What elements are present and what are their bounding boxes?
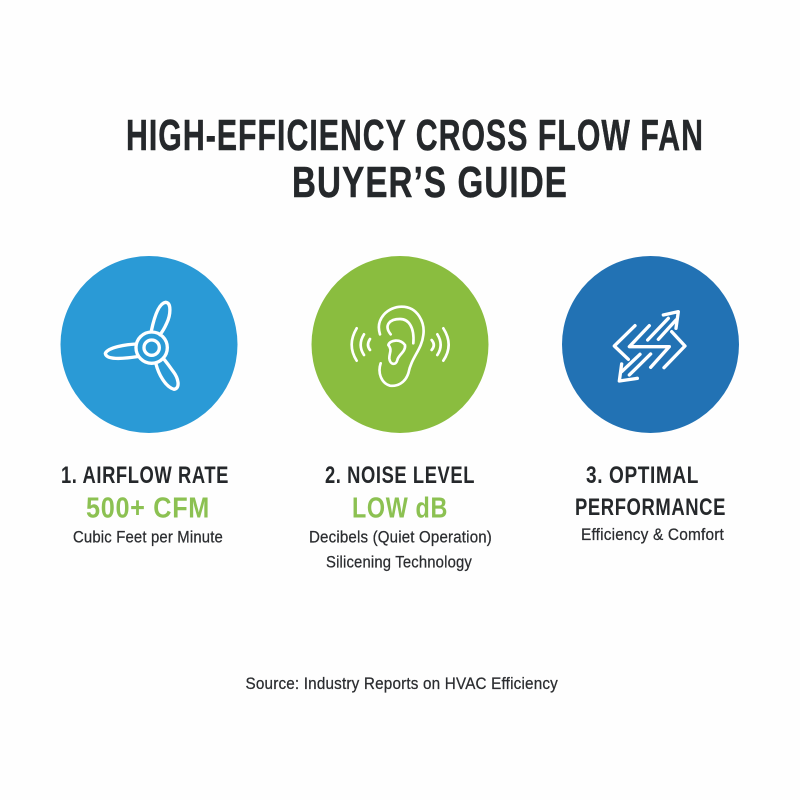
description: noise technology: Silicening Technology xyxy=(326,552,472,572)
icon: fan xyxy=(105,302,178,389)
heading: noise level: 2. NOISE LEVEL xyxy=(325,462,475,489)
icon: ear with sound waves xyxy=(352,307,449,386)
description: airflow unit: Cubic Feet per Minute xyxy=(73,528,223,546)
panel: airflow rate xyxy=(60,256,238,546)
circle: airflow rate xyxy=(60,256,238,433)
panel: optimal performance xyxy=(562,256,739,544)
description: efficiency and comfort: Efficiency & Comfort xyxy=(581,525,724,544)
circle: optimal performance xyxy=(562,256,739,433)
value: LOW dB: LOW dB xyxy=(352,492,448,524)
title: BUYER’S GUIDE xyxy=(292,158,568,207)
icon: cross flow arrows xyxy=(614,312,685,381)
source note: Source: Industry Reports on HVAC Efficiency xyxy=(246,674,558,693)
panel: noise level xyxy=(309,256,492,572)
heading: optimal performance: PERFORMANCE xyxy=(575,494,726,521)
heading: optimal performance: 3. OPTIMAL xyxy=(586,462,699,489)
value: 500+ CFM: 500+ CFM xyxy=(86,492,210,524)
title xyxy=(126,111,704,207)
heading: airflow rate: 1. AIRFLOW RATE xyxy=(61,462,229,489)
description: noise unit: Decibels (Quiet Operation) xyxy=(309,528,492,546)
circle: noise level xyxy=(312,256,488,433)
heading: optimal performance xyxy=(575,462,726,521)
